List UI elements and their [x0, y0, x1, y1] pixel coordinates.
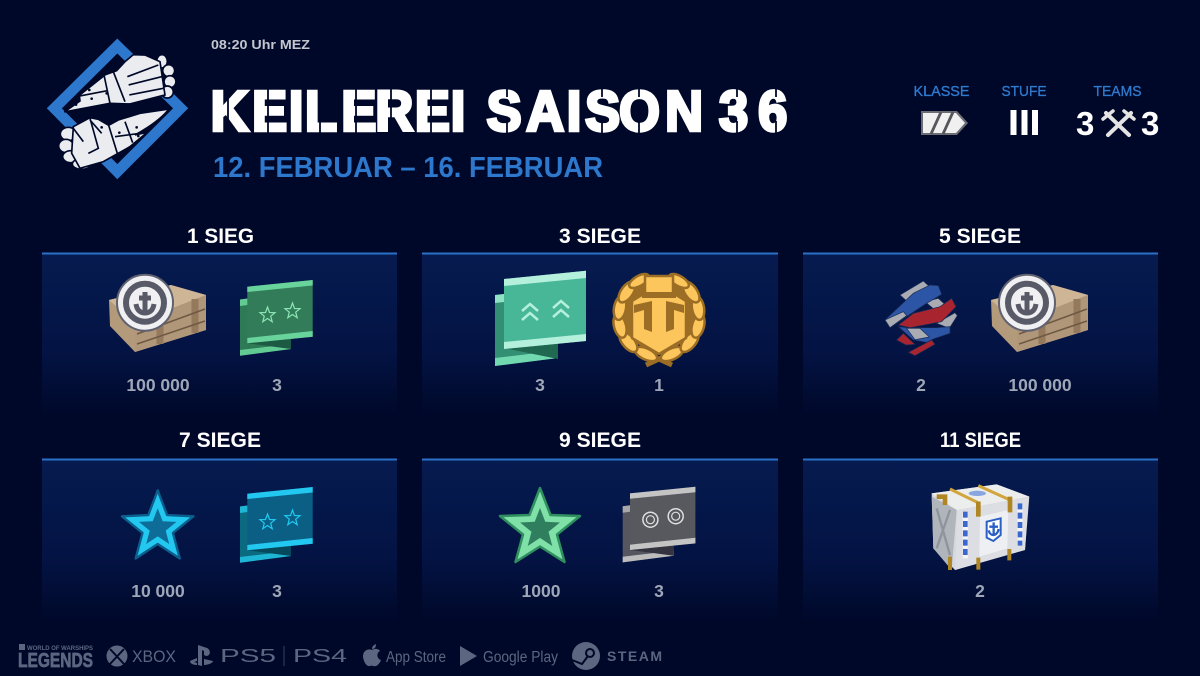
logo: Steam: STEAM	[607, 648, 662, 664]
info: teams: 3	[1141, 105, 1159, 142]
text: 10 000: 10 000	[131, 581, 185, 601]
icon: class tier arrow	[921, 111, 968, 135]
text: 3: 3	[272, 581, 282, 601]
logo: Google Play: Google Play	[483, 649, 558, 666]
info: class: KLASSE	[914, 84, 970, 100]
icon: gauntlets in blue diamond	[54, 46, 181, 172]
logo: Google Play	[460, 646, 558, 666]
panel: 11 SIEGE: 11 SIEGE	[940, 429, 1021, 452]
info: teams: 3	[1076, 105, 1094, 142]
icon: white navy crate	[932, 484, 1029, 570]
icon: crossed swords	[1103, 111, 1134, 135]
logo: Xbox: XBOX	[132, 647, 176, 666]
footer: platform logos	[18, 642, 662, 672]
logo: PS5 and PS4: PS5	[220, 646, 276, 666]
info: teams: TEAMS	[1094, 84, 1142, 100]
icon: cyan signal flag	[240, 487, 313, 563]
date subtitle: 12. FEBRUAR – 16. FEBRUAR	[213, 152, 603, 184]
icon: green signal flag	[240, 280, 313, 356]
text: 100 000: 100 000	[1008, 375, 1072, 395]
panel: 3 SIEGE: 3 SIEGE	[559, 225, 641, 248]
logo: World of Warships Legends: WORLD OF WARSHIPS	[27, 645, 94, 652]
text: 1000: 1000	[522, 581, 561, 601]
panel: 5 SIEGE: 5 SIEGE	[939, 225, 1021, 248]
text: 3: 3	[654, 581, 664, 601]
text: 3: 3	[272, 375, 282, 395]
panel: 9 SIEGE: 9 SIEGE	[559, 429, 641, 452]
info: teams	[1076, 84, 1159, 142]
panel: 11 SIEGE	[803, 429, 1158, 624]
panel: 7 SIEGE	[42, 429, 397, 624]
icon: credits crate	[109, 275, 206, 352]
logo: World of Warships Legends	[18, 644, 94, 672]
logo: World of Warships Legends: LEGENDS	[18, 650, 93, 672]
panel: 1 SIEG	[42, 225, 397, 418]
icon: gold laurel medal	[611, 271, 707, 365]
panel: 7 SIEGE: 7 SIEGE	[179, 429, 261, 452]
panel: 1 SIEG: 1 SIEG	[187, 225, 254, 248]
text: 2: 2	[975, 581, 985, 601]
text: 3: 3	[535, 375, 545, 395]
logo: PS5 and PS4: PS4	[293, 646, 347, 666]
text: 1: 1	[654, 375, 664, 395]
panel: 5 SIEGE	[803, 225, 1158, 418]
logo: Xbox	[106, 646, 176, 666]
icon: credits crate	[991, 275, 1088, 352]
time label: 08:20 Uhr MEZ	[211, 37, 310, 52]
panel: 9 SIEGE	[422, 429, 778, 624]
icon: teal signal flag	[495, 271, 586, 366]
icon: green star	[500, 488, 580, 562]
icon: tier three bars	[1010, 110, 1038, 135]
info: tier: STUFE	[1002, 84, 1047, 100]
logo: App Store: App Store	[386, 649, 446, 666]
text: 100 000: 100 000	[126, 375, 190, 395]
info: class	[914, 84, 970, 135]
info: tier	[1002, 84, 1047, 135]
icon: cyan star	[122, 490, 193, 558]
panel: 3 SIEGE	[422, 225, 778, 418]
logo: PS5 and PS4	[190, 645, 347, 666]
icon: grey signal flag	[623, 487, 695, 562]
icon: red white blue camouflage	[885, 281, 957, 356]
title: KEILEREISAISON 36	[211, 78, 787, 143]
logo: Steam	[572, 642, 662, 670]
text: 2: 2	[916, 375, 926, 395]
logo: App Store	[363, 644, 446, 666]
